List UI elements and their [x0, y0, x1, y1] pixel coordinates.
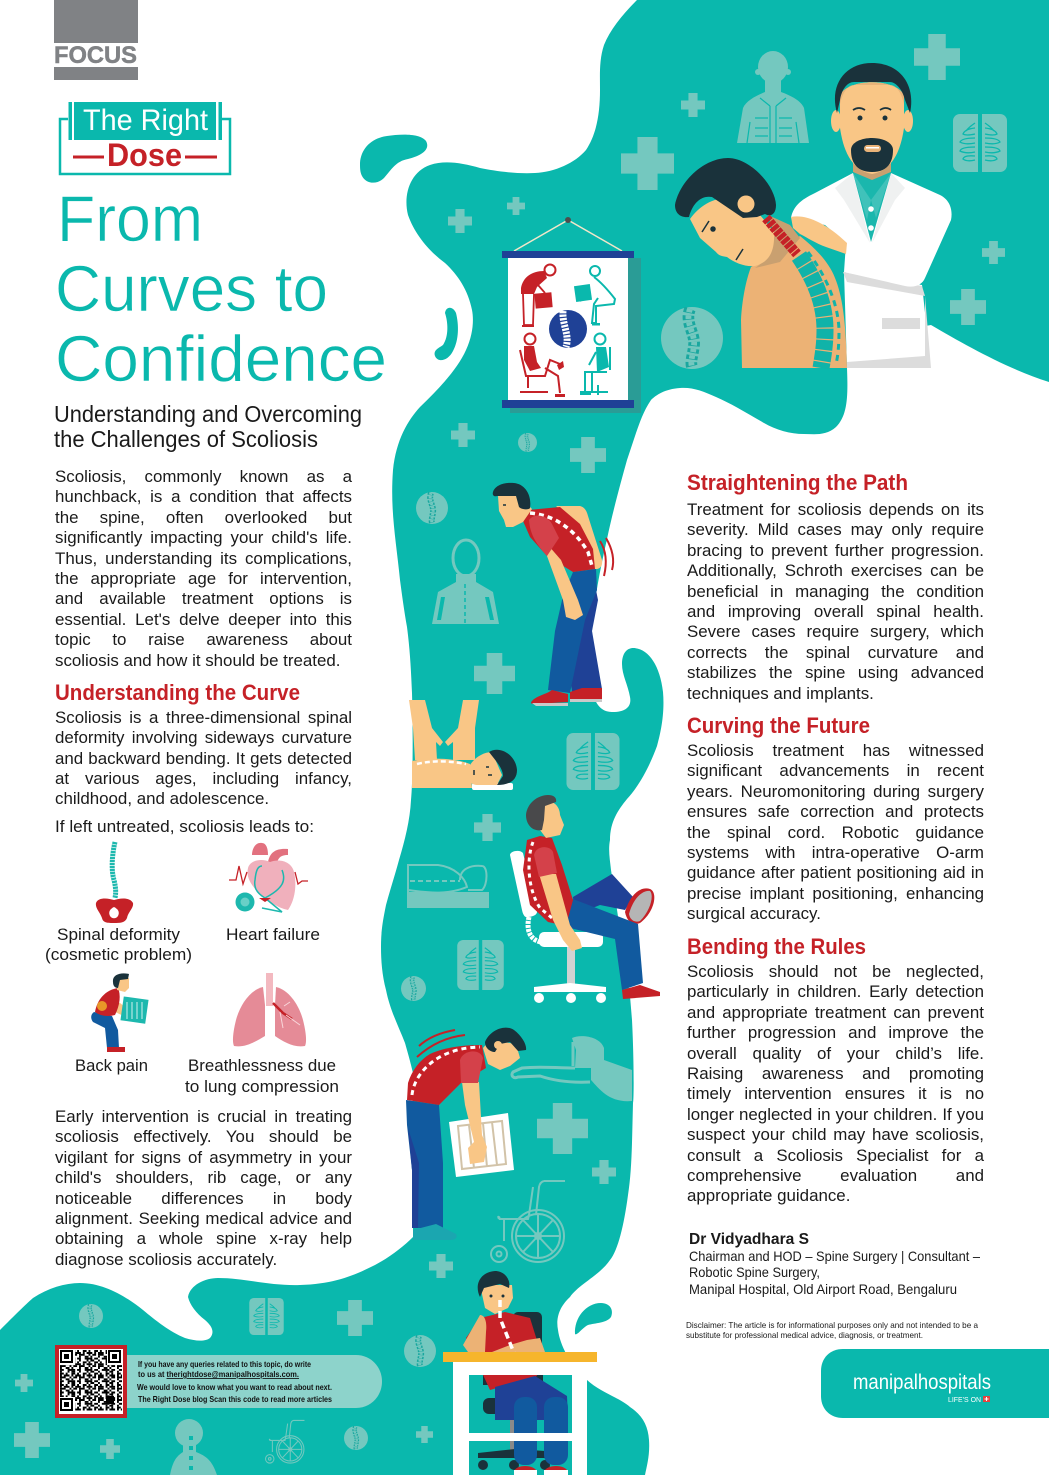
bending the rules paragraph: particularly in children. Early detection	[687, 982, 984, 1001]
heading: Curving the Future: Curving the Future	[687, 713, 870, 738]
bending the rules paragraph: longer neglected in your children. If you	[687, 1105, 984, 1124]
chair back	[513, 1312, 542, 1357]
disclaimer: Disclaimer: The article is for informational purposes only and not intended to be a	[686, 1320, 978, 1330]
curving the future paragraph: precise implant positioning, enhancing	[687, 884, 984, 903]
brand: The Right Dose: The Right	[83, 104, 209, 137]
teal crescent	[435, 308, 458, 360]
curving the future paragraph: guidance after patient positioning aid in	[687, 863, 984, 882]
straightening the path paragraph: Severe cases require surgery, which	[687, 622, 984, 641]
author credit	[689, 1231, 980, 1297]
bending the rules paragraph: overall quality of your child’s life.	[687, 1044, 984, 1063]
figure: man bending forward with x-ray	[406, 1028, 526, 1240]
poster of correct and incorrect posture	[502, 217, 641, 413]
straightening the path paragraph	[687, 500, 984, 703]
lower leg	[565, 899, 643, 990]
manipal hospitals logo: LIFE'S ON	[948, 1395, 981, 1404]
lapels	[835, 173, 905, 243]
curving the future paragraph	[687, 741, 984, 923]
arcs	[417, 1030, 465, 1057]
bending the rules paragraph: and appropriate treatment can prevent	[687, 1003, 984, 1022]
bending the rules paragraph: timely intervention ensures it is no	[687, 1084, 984, 1103]
poster spine circle	[549, 310, 587, 348]
heart and stethoscope icon	[229, 843, 308, 912]
bending the rules paragraph: consult a Scoliosis Specialist for a	[687, 1146, 984, 1165]
patient eye, brow and smile	[702, 221, 743, 260]
intro paragraph: and available treatment options is	[55, 589, 352, 608]
complication: spinal deformity: Spinal deformity	[57, 925, 181, 944]
figure: bending man holding lower back	[493, 483, 613, 706]
bending the rules paragraph: appropriate guidance.	[687, 1186, 850, 1205]
bare back	[741, 236, 847, 368]
head	[540, 801, 564, 838]
chair	[510, 851, 537, 917]
understanding the curve paragraph: at various ages, including infancy,	[55, 769, 352, 788]
icon: arm reaching silhouette	[512, 1036, 632, 1101]
author credit: Chairman and HOD – Spine Surgery | Consultant –	[689, 1248, 980, 1264]
early intervention paragraph: noticeable differences in body	[55, 1189, 352, 1208]
doctor illustration	[791, 63, 952, 368]
title: From	[57, 182, 203, 255]
curving the future paragraph: years. Neuromonitoring during surgery	[687, 782, 984, 801]
subtitle: Understanding and Overcoming	[54, 401, 362, 427]
neck shadow	[755, 215, 800, 268]
understanding the curve paragraph: and backward bending. It gets detected	[55, 749, 352, 768]
title	[55, 182, 387, 395]
complication: back pain: Back pain	[75, 1056, 148, 1075]
poster figure: good sitting	[580, 334, 610, 395]
icon: back brace silhouette	[737, 51, 809, 143]
title: Curves to	[55, 252, 328, 325]
complication: breathlessness: Breathlessness due	[188, 1056, 336, 1075]
bending the rules paragraph: Raising awareness and promoting	[687, 1064, 984, 1083]
head	[498, 496, 532, 527]
desk	[453, 1362, 587, 1375]
disclaimer	[686, 1320, 978, 1340]
face	[480, 1285, 513, 1314]
head skin	[690, 198, 774, 266]
disclaimer: substitute for professional medical advice, diagnosis, or treatment.	[686, 1330, 923, 1340]
straightening the path paragraph: Treatment for scoliosis depends on its	[687, 500, 984, 519]
shoes	[531, 688, 602, 704]
icon: standing silhouette with spine	[170, 1419, 217, 1475]
early intervention paragraph: child's shoulders, rib cage, or any	[55, 1168, 352, 1187]
spine and pelvis icon	[96, 842, 133, 923]
torso	[407, 1045, 486, 1105]
curving the future paragraph: Scoliosis treatment has witnessed	[687, 741, 984, 760]
intro paragraph: essential. Let's delve deeper into this	[55, 610, 352, 629]
brand: Focus logo	[54, 0, 138, 80]
back arm	[556, 506, 602, 569]
contact text: The Right Dose blog Scan this code to read more articles	[138, 1394, 332, 1404]
arm	[539, 874, 582, 951]
dashed spine	[500, 1300, 516, 1358]
straightening the path paragraph: corrects the spinal curvature and	[687, 643, 984, 662]
early intervention paragraph	[55, 1107, 352, 1269]
doctor eyes and brows	[853, 108, 891, 120]
raised leg	[573, 874, 633, 915]
complication: breathlessness	[185, 973, 339, 1096]
shirt	[853, 173, 891, 242]
contact text: If you have any queries related to this topic, do write	[138, 1359, 311, 1369]
intro paragraph: the appropriate age for intervention,	[55, 569, 352, 588]
intro paragraph: hunchback, is a condition that affects	[55, 487, 352, 506]
understanding the curve paragraph: Scoliosis is a three-dimensional spinal	[55, 708, 352, 727]
contact text: We would love to know what you want to read about next.	[137, 1382, 332, 1392]
spine red upper section	[766, 218, 797, 254]
straightening the path paragraph: stabilizes the spine using advanced	[687, 663, 984, 682]
icon: small wheelchair	[266, 1420, 304, 1463]
early intervention paragraph: scoliosis effectively. You should be	[55, 1127, 352, 1146]
author credit: Robotic Spine Surgery,	[689, 1264, 820, 1280]
complication: spinal deformity	[45, 842, 192, 964]
complication: breathlessness: to lung compression	[185, 1077, 339, 1096]
early intervention paragraph: obtaining a whole spine x-ray help	[55, 1229, 352, 1248]
lead-in sentence: If left untreated, scoliosis leads to:	[55, 817, 314, 836]
foot of sitting man	[622, 985, 660, 999]
bending the rules paragraph: suspect your child may have scoliosis,	[687, 1125, 984, 1144]
figure: hands examining patient's back	[409, 700, 517, 790]
manipal hospitals logo: manipalhospitals	[853, 1371, 991, 1394]
complication: back pain	[75, 973, 149, 1075]
front leg	[548, 569, 597, 693]
brand: The Right Dose	[60, 102, 230, 174]
author credit: Dr Vidyadhara S	[689, 1231, 809, 1248]
straightening the path paragraph: techniques and implants.	[687, 684, 874, 703]
curving the future paragraph: systems with intra-operative O-arm	[687, 843, 984, 862]
intro paragraph: significantly impacting your child's life.	[55, 528, 352, 547]
bending the rules paragraph: further progression and improve the	[687, 1023, 984, 1042]
figure: boy sitting at desk	[443, 1271, 597, 1475]
complication: heart failure	[226, 843, 320, 944]
early intervention paragraph: alignment. Seeking medical advice and	[55, 1209, 352, 1228]
contact strip	[127, 1355, 382, 1408]
coat upper	[791, 173, 952, 287]
intro paragraph: topic to raise awareness about	[55, 630, 352, 649]
early intervention paragraph: diagnose scoliosis accurately.	[55, 1250, 277, 1269]
straightening the path paragraph: and improving overall spinal health.	[687, 602, 984, 621]
straightening the path paragraph: bracing to prevent further progression.	[687, 541, 984, 560]
patient with curved spine	[675, 158, 847, 368]
pain arcs	[600, 538, 613, 576]
brand: The Right Dose: Dose	[107, 137, 182, 173]
contact text	[137, 1359, 332, 1404]
teal droplet near title	[360, 135, 427, 183]
hair	[675, 158, 776, 218]
icon: torso silhouette	[432, 540, 499, 624]
teal droplet bottom	[575, 1303, 612, 1334]
torso	[466, 1312, 540, 1390]
curving the future paragraph: ensures safe correction and protects	[687, 802, 984, 821]
brand: Focus logo: FOCUS	[54, 42, 137, 69]
title: Confidence	[55, 322, 387, 395]
manipal hospitals logo	[821, 1349, 1049, 1418]
beard	[851, 138, 893, 172]
bending the rules paragraph: comprehensive evaluation and	[687, 1166, 984, 1185]
torso	[523, 836, 573, 926]
icon: patient lying on bed	[408, 865, 488, 907]
complication: spinal deformity: (cosmetic problem)	[45, 945, 192, 964]
bending the rules paragraph: Scoliosis should not be neglected,	[687, 962, 984, 981]
pants	[406, 1100, 443, 1228]
straightening the path paragraph: Additionally, Schroth exercises can be	[687, 561, 984, 580]
face	[840, 82, 904, 174]
doctor's hand on shoulder	[791, 216, 847, 254]
early intervention paragraph: vigilant for signs of asymmetry in your	[55, 1148, 352, 1167]
bending the rules paragraph	[687, 962, 984, 1205]
lungs icon	[233, 973, 306, 1046]
understanding the curve paragraph: childhood, and adolescence.	[55, 789, 269, 808]
man lifting icon	[91, 973, 149, 1052]
heading: Understanding the Curve: Understanding the Curve	[55, 680, 300, 705]
curving the future paragraph: the spinal cord. Robotic guidance	[687, 823, 984, 842]
understanding the curve paragraph: deformity involving sideways curvature	[55, 728, 352, 747]
coat lower body	[844, 272, 931, 368]
curving the future paragraph: significant advancements in recent	[687, 761, 984, 780]
straightening the path paragraph: severity. Mild cases may only require	[687, 520, 984, 539]
rear leg	[566, 570, 602, 692]
intro paragraph: Scoliosis, commonly known as a	[55, 467, 352, 486]
front arm	[547, 545, 583, 620]
intro paragraph: Thus, understanding its complications,	[55, 549, 352, 568]
background x-ray icons	[249, 114, 1007, 1335]
pelvis and legs	[495, 1376, 568, 1420]
straightening the path paragraph: beneficial in managing the condition	[687, 582, 984, 601]
poster figure: bad bending	[521, 264, 556, 327]
shoes	[514, 1466, 568, 1472]
early intervention paragraph: Early intervention is crucial in treating	[55, 1107, 352, 1126]
x-ray sheet	[449, 1113, 514, 1177]
poster figure: good lifting	[574, 266, 615, 326]
curving the future paragraph: surgical accuracy.	[687, 904, 821, 923]
heading: Bending the Rules: Bending the Rules	[687, 934, 866, 959]
torso	[523, 507, 595, 572]
shoe	[413, 1224, 457, 1240]
intro paragraph: scoliosis and how it should be treated.	[55, 651, 340, 670]
poster figure: bad sitting	[520, 334, 565, 397]
complication: heart failure: Heart failure	[226, 925, 320, 944]
intro paragraph: the spine, often overlooked but	[55, 508, 352, 527]
author credit: Manipal Hospital, Old Airport Road, Bengaluru	[689, 1281, 957, 1297]
background spine badges	[79, 307, 723, 1450]
neck	[853, 162, 891, 180]
arm	[463, 1315, 486, 1352]
chair seat and base	[483, 1398, 543, 1414]
intro paragraph	[55, 467, 352, 670]
spine teal section	[799, 256, 825, 368]
contact text: to us at therightdose@manipalhospitals.com.	[138, 1369, 299, 1379]
QR code	[55, 1345, 127, 1418]
arm	[462, 1082, 487, 1164]
understanding the curve paragraph	[55, 708, 352, 808]
heading: Straightening the Path: Straightening the Path	[687, 470, 908, 495]
subtitle: the Challenges of Scoliosis	[54, 426, 318, 452]
icon: wheelchair	[491, 1181, 565, 1262]
head	[483, 1040, 520, 1070]
hair	[835, 63, 911, 113]
figure: man sitting slouched on chair	[510, 795, 654, 1003]
subtitle	[54, 401, 362, 452]
ears	[831, 110, 841, 132]
